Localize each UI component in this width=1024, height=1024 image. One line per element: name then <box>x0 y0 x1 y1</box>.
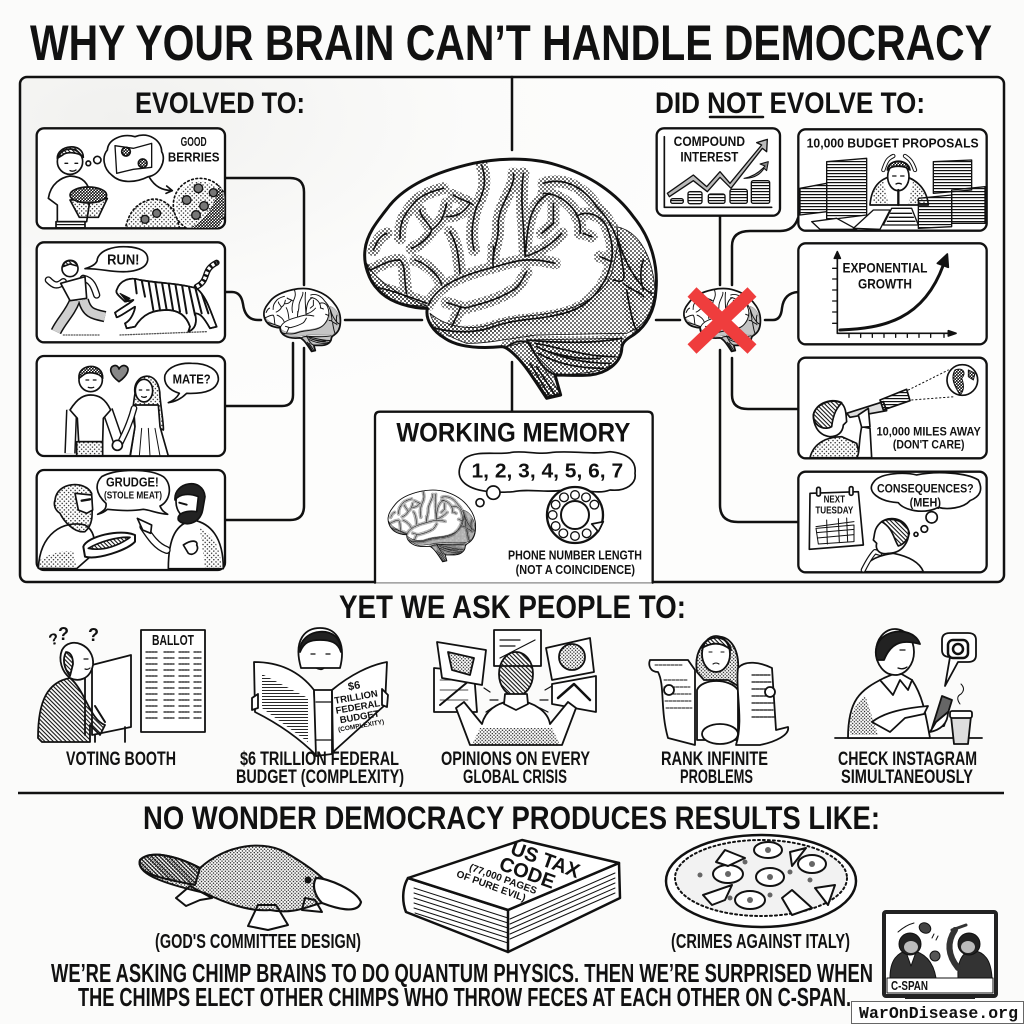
icon: voting booth: ? <box>47 631 61 649</box>
panel: brain comparison <box>20 77 1004 582</box>
right column panels <box>657 128 987 572</box>
panel frame <box>20 77 1004 582</box>
left column panels <box>37 128 227 570</box>
row: democracy results <box>140 835 996 999</box>
label: check instagram <box>838 749 977 788</box>
icon: platypus <box>140 846 361 930</box>
label: federal budget: BUDGET (COMPLEXITY) <box>236 767 404 788</box>
ballot sheet <box>141 630 205 732</box>
panel: consequences: (MEH) <box>910 495 941 509</box>
icon: federal budget book <box>252 628 388 756</box>
panel: good berries <box>37 128 227 232</box>
label: federal budget <box>236 749 404 788</box>
icon: federal budget book: TRILLION <box>334 688 379 707</box>
panel: telescope: (DON'T CARE) <box>893 438 964 452</box>
label: rank problems <box>661 749 768 788</box>
phone number caption: PHONE NUMBER LENGTH <box>508 549 642 563</box>
thought bubble: digits: 1, 2, 3, 4, 5, 6, 7 <box>471 461 623 483</box>
phone number caption: (NOT A COINCIDENCE) <box>516 563 635 577</box>
closing statement <box>51 958 873 1012</box>
panel: grudge: GRUDGE! <box>106 476 159 490</box>
heading: no wonder: NO WONDER DEMOCRACY PRODUCES RESULTS LIKE: <box>143 800 880 836</box>
icon: opinions on global crises <box>434 630 596 745</box>
label: check instagram: CHECK INSTAGRAM <box>838 749 977 770</box>
panel: good berries: BERRIES <box>168 150 220 165</box>
panel: grudge <box>37 470 225 570</box>
icon: us tax code book <box>403 838 620 952</box>
panel: consequences <box>798 472 987 572</box>
panel: grudge: (STOLE MEAT) <box>104 491 162 502</box>
memory box frame <box>375 412 653 583</box>
small brain: evolved <box>264 289 340 351</box>
heading: working memory: WORKING MEMORY <box>396 418 631 448</box>
label: global crisis <box>441 749 590 788</box>
icon: federal budget book: (COMPLEXITY) <box>338 719 385 734</box>
section divider <box>18 792 1004 794</box>
label: voting booth: VOTING BOOTH <box>66 749 176 770</box>
panel: consequences: NEXT <box>824 495 845 506</box>
icon: pizza <box>666 835 856 927</box>
panel: working memory <box>375 412 653 583</box>
panel: compound interest: INTEREST <box>680 150 739 165</box>
panel: exponential growth: GROWTH <box>858 276 912 291</box>
label: global crisis: GLOBAL CRISIS <box>463 767 567 788</box>
panel: telescope <box>798 358 987 458</box>
watermark: WarOnDisease.org <box>859 1004 1018 1023</box>
panel: compound interest: COMPOUND <box>674 134 745 149</box>
phone number caption <box>508 549 642 577</box>
central brain <box>365 159 656 398</box>
panel: exponential growth: EXPONENTIAL <box>842 261 927 276</box>
small brain: memory <box>388 490 476 562</box>
icon: c-span tv with chimps <box>884 912 996 999</box>
panel: consequences: TUESDAY <box>815 505 854 516</box>
label: rank problems: RANK INFINITE <box>661 749 768 770</box>
panel: telescope: 10,000 MILES AWAY <box>876 424 982 438</box>
row: what we ask people <box>38 624 982 788</box>
panel: good berries: GOOD <box>181 134 207 149</box>
panel: budget proposals <box>798 129 987 231</box>
connector lines <box>226 77 798 522</box>
icon: voting booth <box>38 624 205 742</box>
thought bubble: digits <box>459 452 635 507</box>
icon: federal budget book: FEDERAL <box>335 698 381 717</box>
label: global crisis: OPINIONS ON EVERY <box>441 749 590 770</box>
label: pizza caption: (CRIMES AGAINST ITALY) <box>671 931 850 953</box>
panel: run from tiger <box>37 242 225 342</box>
panel: mate <box>37 356 225 456</box>
icon: federal budget book: $6 <box>347 679 361 693</box>
icon: c-span tv with chimps: C-SPAN <box>891 978 928 993</box>
small brain: crossed out <box>684 289 760 351</box>
icon: checking instagram <box>835 629 982 744</box>
icon: voting booth: ? <box>88 625 99 645</box>
ballot sheet: BALLOT <box>152 632 194 649</box>
icon: voting booth: ? <box>58 624 69 644</box>
label: federal budget: $6 TRILLION FEDERAL <box>240 749 399 770</box>
label: rank problems: PROBLEMS <box>680 767 753 788</box>
panel: consequences: CONSEQUENCES? <box>877 482 974 496</box>
icon: us tax code book: CODE <box>496 853 558 894</box>
label: platypus caption: (GOD'S COMMITTEE DESIGN) <box>155 931 361 953</box>
icon: rotary phone dial <box>547 487 603 543</box>
panel: exponential growth <box>798 243 987 344</box>
panel: budget proposals: 10,000 BUDGET PROPOSALS <box>807 136 979 151</box>
panel: run from tiger: RUN! <box>107 251 139 268</box>
heading: evolved to: EVOLVED TO: <box>135 87 305 120</box>
icon: federal budget book: BUDGET <box>339 708 381 726</box>
icon: us tax code book: OF PURE EVIL) <box>455 869 527 904</box>
heading: did not evolve to: DID NOT EVOLVE TO: <box>655 87 925 120</box>
icon: us tax code book: (77,000 PAGES <box>468 862 538 897</box>
heading: yet we ask people to: YET WE ASK PEOPLE TO: <box>339 589 686 625</box>
panel: mate: MATE? <box>173 371 211 386</box>
label: check instagram: SIMULTANEOUSLY <box>841 767 973 788</box>
icon: us tax code book: US TAX <box>508 838 583 883</box>
icon: scroll of infinite problems <box>649 636 788 745</box>
panel: compound interest <box>657 128 780 216</box>
